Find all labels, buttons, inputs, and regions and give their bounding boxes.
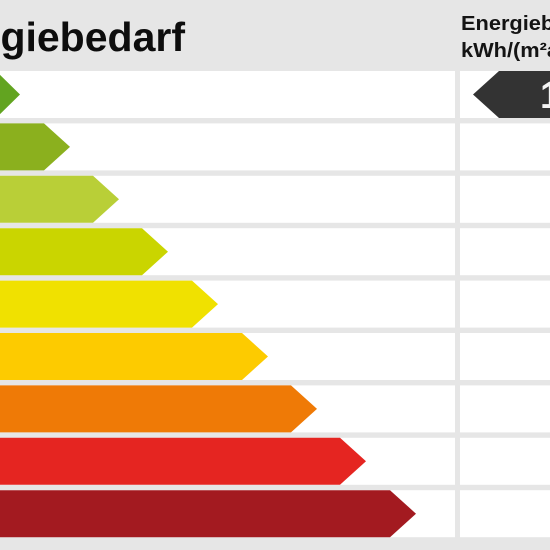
arrow: class 9: [0, 490, 416, 537]
arrow: class 4: [0, 228, 168, 275]
arrow: class 5: [0, 281, 218, 328]
column heading: energy demand unit: [461, 13, 550, 62]
chart: energy class arrows: [0, 71, 416, 537]
arrow: class 2: [0, 123, 70, 170]
arrow: class 1: [0, 71, 20, 118]
panel: value rows: [460, 71, 550, 537]
panel: scale rows: [0, 71, 455, 537]
arrow: class 3: [0, 176, 119, 223]
arrow: class 6: [0, 333, 268, 380]
value marker arrow: [473, 71, 550, 118]
arrow: class 8: [0, 438, 366, 485]
arrow: class 7: [0, 385, 317, 432]
